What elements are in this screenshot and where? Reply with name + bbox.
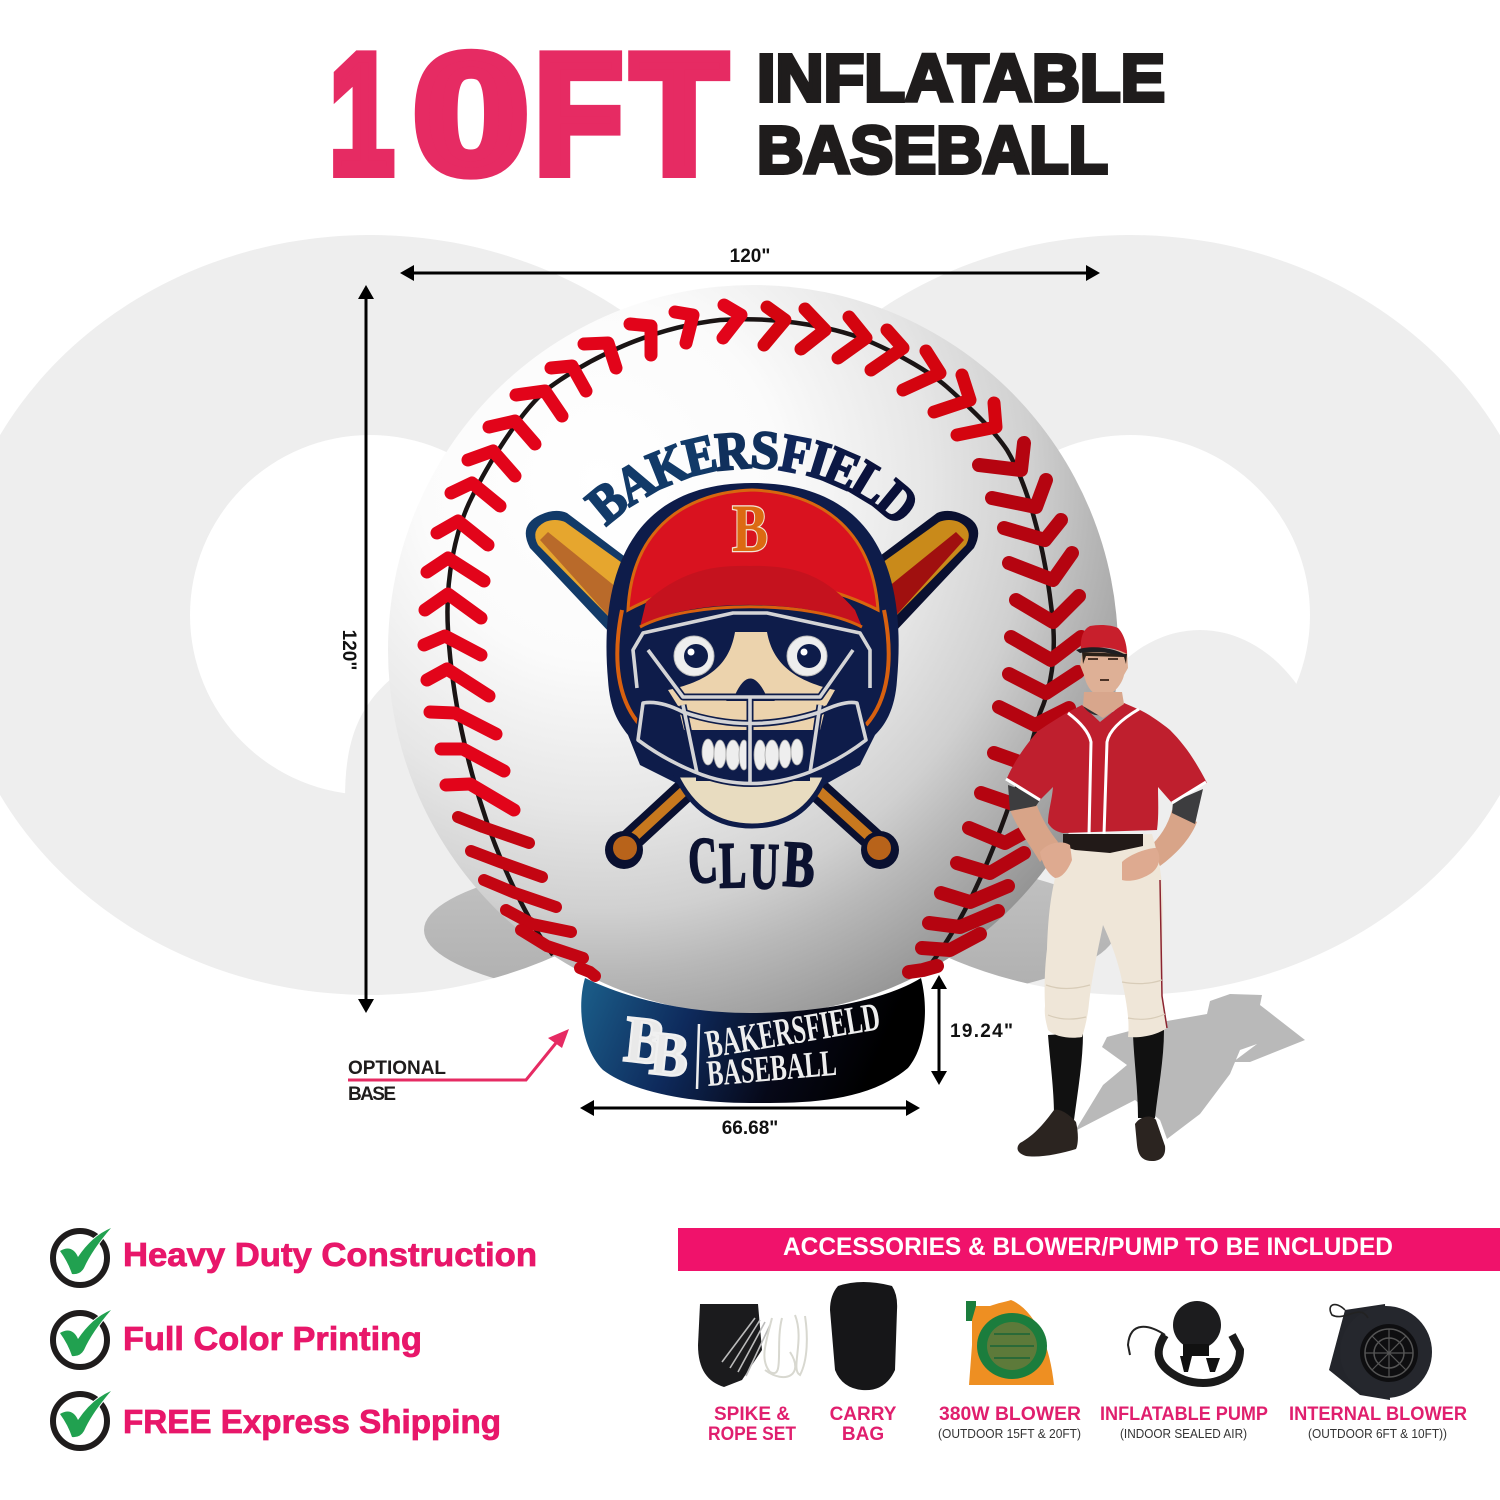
eyes	[674, 636, 827, 676]
logo text: club: C	[686, 824, 719, 897]
head	[1080, 650, 1128, 696]
crossed bats	[526, 511, 978, 869]
base divider	[697, 1024, 699, 1089]
cleats	[1018, 1110, 1165, 1161]
label: inflatable pump: (INDOOR SEALED AIR)	[1120, 1427, 1247, 1441]
feature: full color printing	[53, 1310, 422, 1367]
BB monogram: B	[621, 1003, 669, 1079]
logo text: Bakersfield: D	[865, 469, 929, 537]
logo text: Bakersfield: I	[801, 430, 837, 492]
stitches lower left	[458, 817, 595, 976]
height arrow	[358, 285, 374, 1013]
width arrow	[400, 265, 1100, 281]
title: 10FT: 1	[330, 21, 394, 208]
label: base width: 66.68"	[722, 1118, 778, 1139]
label: carry bag	[830, 1404, 897, 1445]
title: 10FT	[330, 20, 726, 209]
BB monogram: B	[647, 1019, 692, 1091]
logo text: Bakersfield: S	[749, 420, 781, 481]
icon: check	[53, 1228, 111, 1285]
stitches right	[764, 307, 996, 435]
logo text: club: B	[782, 829, 817, 902]
label: inflatable pump: INFLATABLE PUMP	[1100, 1404, 1268, 1425]
pants	[1045, 834, 1167, 1038]
feature: free express shipping: FREE Express Shipping	[123, 1403, 501, 1440]
belt	[1063, 834, 1143, 853]
logo text: Bakersfield	[576, 420, 929, 537]
skull	[668, 632, 835, 826]
title: 10FT: T	[632, 21, 726, 208]
label: inflatable pump	[1100, 1404, 1268, 1441]
base width arrow	[580, 1100, 920, 1116]
player shadow	[1075, 994, 1305, 1139]
helmet	[606, 483, 899, 790]
optional base	[581, 978, 925, 1103]
logo text: Bakersfield: E	[815, 436, 868, 503]
face mask	[633, 613, 870, 784]
label: carry bag: BAG	[842, 1424, 884, 1445]
team logo	[526, 420, 978, 903]
label: 380w blower	[938, 1404, 1081, 1441]
BB monogram	[620, 1003, 693, 1091]
label: internal blower	[1289, 1404, 1467, 1441]
icon: carry bag	[830, 1282, 897, 1390]
undershirt collar	[1083, 703, 1124, 715]
label: spike and rope set: ROPE SET	[708, 1424, 796, 1445]
hands	[1040, 842, 1159, 881]
base body	[581, 978, 925, 1103]
icon: 380w blower	[966, 1300, 1054, 1385]
logo text: Bakersfield: B	[576, 469, 639, 536]
logo text: Bakersfield: L	[841, 449, 899, 517]
logo text: Bakersfield: A	[605, 448, 666, 518]
base text: BAKERSFIELD	[702, 993, 883, 1067]
icon: check	[53, 1391, 111, 1448]
ground shadow of ball	[424, 879, 1111, 984]
label: 380w blower: (OUTDOOR 15FT & 20FT)	[938, 1427, 1081, 1441]
title: baseball: BASEBALL	[757, 113, 1108, 188]
arms	[1010, 803, 1197, 866]
icon: internal blower	[1329, 1304, 1432, 1400]
background rings	[0, 235, 1500, 995]
title: inflatable: INFLATABLE	[757, 41, 1165, 116]
logo text: Bakersfield: E	[678, 424, 722, 489]
logo text: club: L	[719, 829, 747, 902]
feature: heavy duty construction: Heavy Duty Construction	[123, 1236, 537, 1273]
icon: inflatable pump	[1128, 1301, 1240, 1383]
logo text: club	[686, 824, 817, 903]
icon: check	[53, 1310, 111, 1367]
feature: full color printing: Full Color Printing	[123, 1320, 422, 1357]
socks	[1048, 1030, 1164, 1120]
baseball player	[1006, 625, 1207, 1161]
callout: optional base: OPTIONAL	[348, 1058, 446, 1079]
cap	[1081, 625, 1127, 654]
label: internal blower: INTERNAL BLOWER	[1289, 1404, 1467, 1425]
title: 10FT: F	[535, 21, 622, 209]
label: carry bag: CARRY	[830, 1404, 897, 1425]
inflatable baseball	[388, 285, 1118, 1015]
undershirt	[1008, 785, 1203, 824]
logo text: Bakersfield: F	[775, 423, 815, 487]
stitches left	[424, 305, 741, 810]
helmet letter B: B	[732, 490, 768, 566]
label: base height: 19.24"	[950, 1021, 1013, 1042]
title: 10FT: 0	[414, 20, 528, 208]
base height arrow	[931, 975, 947, 1085]
label: spike and rope set: SPIKE &	[714, 1404, 790, 1425]
panel: accessories	[678, 1228, 1500, 1445]
logo text: club: U	[749, 830, 780, 903]
stitches lower right	[909, 443, 1081, 972]
title	[330, 20, 1165, 209]
logo text: Bakersfield: R	[713, 421, 753, 483]
feature: heavy duty construction	[53, 1228, 537, 1285]
ball body	[388, 285, 1118, 1015]
icon: spike and rope set	[698, 1304, 807, 1387]
label: spike and rope set	[708, 1404, 796, 1445]
jersey	[1007, 703, 1207, 833]
base text 2: BASEBALL	[705, 1043, 838, 1095]
seam line	[447, 319, 1054, 965]
label: width: 120"	[730, 246, 770, 267]
dimension arrows	[358, 265, 1100, 1116]
label: 380w blower: 380W BLOWER	[939, 1404, 1081, 1425]
callout: optional base: BASE	[348, 1084, 396, 1105]
label: height: 120"	[338, 630, 359, 670]
label: internal blower: (OUTDOOR 6FT & 10FT))	[1308, 1427, 1447, 1441]
banner	[678, 1228, 1500, 1271]
feature: free express shipping	[53, 1391, 501, 1448]
logo text: Bakersfield: K	[639, 433, 696, 502]
callout: optional base	[348, 1029, 569, 1105]
banner: ACCESSORIES & BLOWER/PUMP TO BE INCLUDED	[783, 1233, 1393, 1261]
